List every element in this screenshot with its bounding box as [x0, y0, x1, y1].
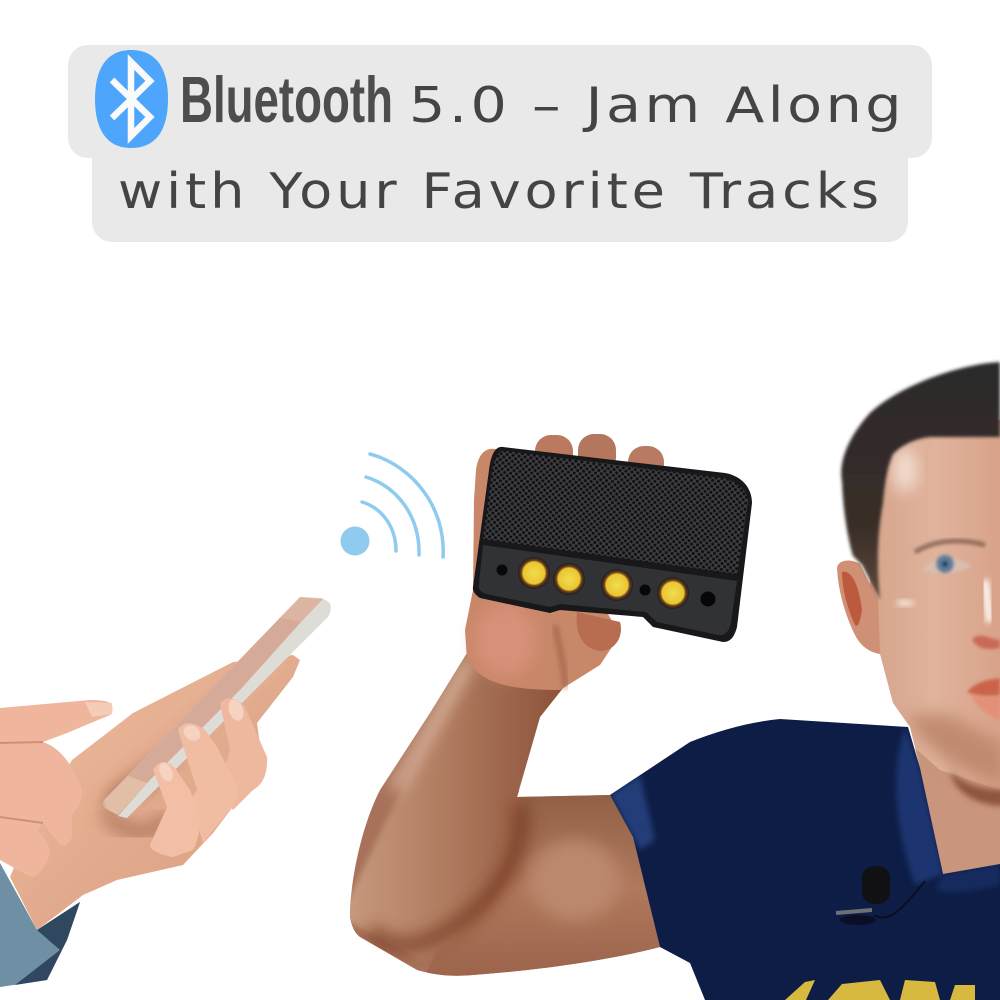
eye: [922, 555, 972, 573]
fingers: [150, 697, 267, 857]
sleeve: [0, 863, 80, 987]
arm: [340, 653, 670, 985]
back hand: [10, 655, 300, 930]
title background: [68, 45, 932, 242]
hair: [841, 362, 1000, 600]
icon: bluetooth logo: [95, 50, 168, 148]
ear: [837, 561, 880, 654]
title line 2: with Your Favorite Tracks: [118, 163, 883, 220]
amplifier: [473, 447, 752, 642]
speaker grille: [483, 451, 748, 574]
head and neck: [870, 420, 1000, 880]
input jack and buttons: [496, 564, 716, 606]
person: [340, 362, 1000, 1000]
nose: [972, 580, 1000, 649]
hands holding phone: [0, 597, 331, 987]
microphone: [836, 866, 925, 925]
shirt: [610, 719, 1000, 1000]
title line 1: [180, 63, 905, 136]
left hand: [0, 700, 112, 877]
control panel: [479, 545, 737, 635]
knobs: [518, 557, 689, 609]
eyebrow: [915, 541, 985, 552]
hand holding amp: [465, 434, 664, 690]
shirt logo: [785, 980, 975, 1000]
amp body: [473, 447, 752, 642]
title line 1: Bluetooth: [180, 63, 393, 136]
mouth: [967, 678, 1000, 720]
title line 1: 5.0 – Jam Along: [409, 77, 905, 134]
icon: wireless signal: [340, 454, 443, 557]
phone: [103, 597, 331, 818]
